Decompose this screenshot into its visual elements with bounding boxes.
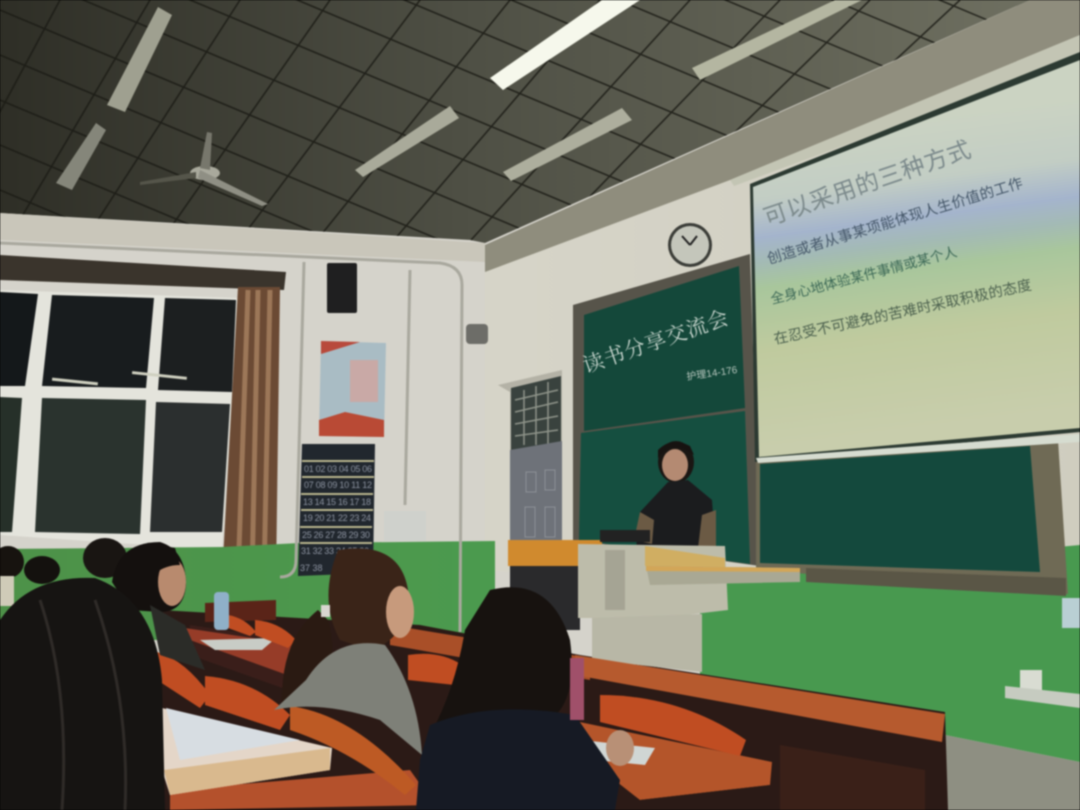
floor [945, 735, 1080, 810]
speaker [634, 441, 716, 556]
pocket chart: 01 02 03 04 05 06 [304, 464, 372, 474]
wall: right front [485, 0, 1080, 620]
chairs [157, 615, 746, 795]
soffit above screen [485, 0, 1080, 272]
slide line 1: 创造或者从事某项能体现人生价值的工作 [765, 175, 1025, 268]
camera [466, 324, 488, 344]
slide title: 可以采用的三种方式 [760, 136, 974, 231]
pocket chart: 19 20 21 22 23 24 [303, 513, 371, 523]
slide line 2: 全身心地体验某件事情或某个人 [769, 243, 959, 307]
water bottle [214, 592, 229, 630]
blackboard [573, 254, 1068, 596]
student: black jacket [416, 587, 634, 810]
green wainscot back wall [0, 541, 495, 640]
wall clock [668, 223, 712, 267]
student: second row [112, 542, 205, 670]
lectern [508, 530, 800, 672]
poster [319, 341, 386, 437]
blackboard heading: 读书分享交流会 [579, 302, 732, 380]
door [498, 370, 562, 540]
ceiling lights [490, 0, 640, 90]
student: foreground long hair [0, 578, 165, 810]
pocket chart: 37 38 [300, 563, 323, 573]
window pelmet [0, 255, 286, 290]
slide line 3: 在忍受不可避免的苦难时采取积极的态度 [772, 277, 1033, 348]
pocket chart: 13 14 15 16 17 18 [303, 497, 371, 507]
pocket chart: 07 08 09 10 11 12 [304, 480, 372, 490]
projection screen [730, 35, 1080, 463]
dark area beneath desks [160, 610, 948, 810]
blackboard signature: 护理14-176 [686, 363, 738, 383]
student: back row left [0, 538, 127, 606]
ceiling [0, 0, 1030, 244]
pocket chart [298, 444, 375, 576]
student: ponytail with grey jacket [274, 548, 422, 755]
desks [162, 600, 945, 810]
right green wainscot [700, 545, 1080, 762]
socket and rail [1020, 670, 1042, 690]
desk items [162, 708, 332, 795]
right board [756, 440, 1068, 594]
curtain [222, 287, 280, 578]
window [0, 290, 238, 550]
pipes [0, 243, 462, 632]
loudspeaker [327, 263, 357, 313]
pocket chart: 25 26 27 28 29 30 [302, 530, 370, 540]
pocket chart: 31 32 33 34 35 36 [301, 546, 369, 556]
notice sheet [384, 511, 426, 541]
wall band under ceiling [0, 213, 485, 262]
ceiling fan [140, 132, 268, 206]
